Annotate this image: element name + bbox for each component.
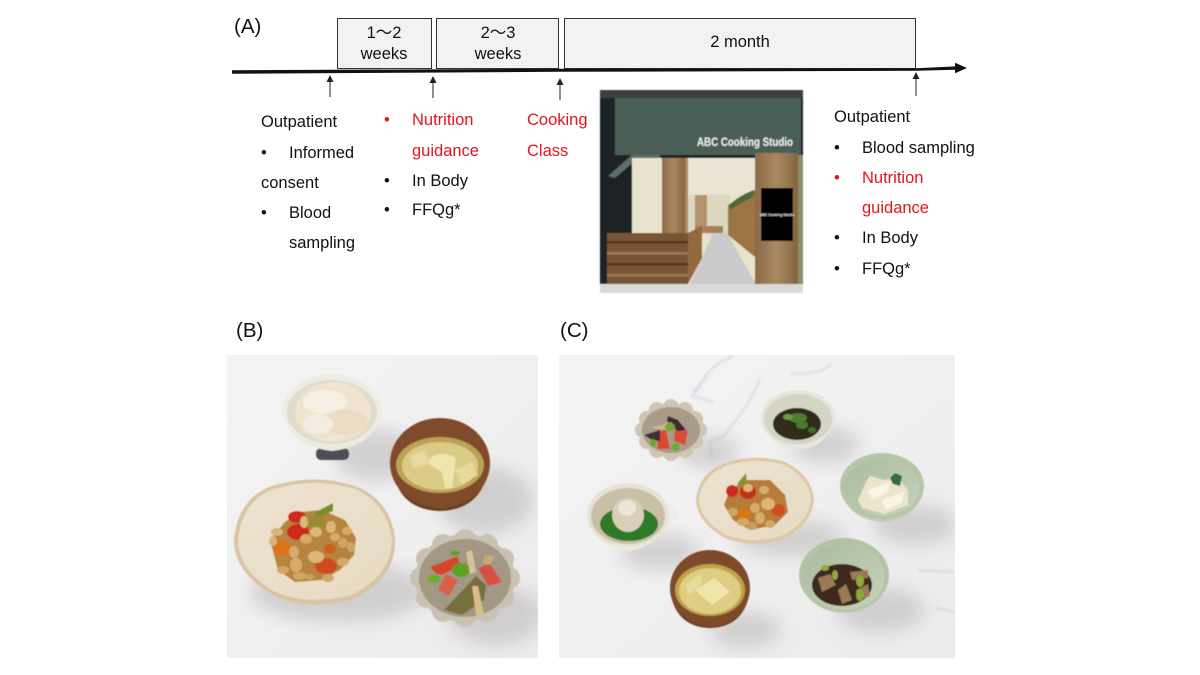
text block: final outpatient visit: • <box>834 260 840 278</box>
arrow: cooking class <box>556 78 564 100</box>
miso soup bowl <box>670 550 750 628</box>
text block: first outpatient visit: • <box>261 144 267 162</box>
text block: cooking class: Class <box>527 142 568 160</box>
text block: final outpatient visit: In Body <box>862 229 919 247</box>
text block: nutrition guidance: • <box>384 111 390 129</box>
period box: 1-2 weeks: 1～2 <box>367 24 401 42</box>
text block: nutrition guidance <box>384 111 479 219</box>
text block: final outpatient visit: • <box>834 229 840 247</box>
period box: 2-3 weeks: 2～3 <box>481 24 515 42</box>
text block: first outpatient visit: Informed <box>289 144 354 162</box>
photo: ABC Cooking Studio storefront: ABC Cooking Studio <box>697 137 793 149</box>
text block: final outpatient visit: Nutrition <box>862 169 923 187</box>
text block: first outpatient visit: Outpatient <box>261 113 338 131</box>
panel A: study timeline <box>232 15 975 293</box>
main plate with soybean stew <box>234 479 395 604</box>
text block: final outpatient visit: • <box>834 139 840 157</box>
photo: ABC Cooking Studio storefront: ABC Cooking Studio <box>760 213 794 217</box>
text block: first outpatient visit: • <box>261 204 267 222</box>
period box: 2 month <box>564 18 916 68</box>
panel label A: (A) <box>234 15 261 38</box>
scalloped side dish <box>410 529 520 627</box>
text block: first outpatient visit: consent <box>261 174 319 192</box>
text block: nutrition guidance: In Body <box>412 172 469 190</box>
arrow: outpatient visit <box>326 75 334 97</box>
green bowl with hijiki <box>799 538 889 613</box>
period box: 2-3 weeks: weeks <box>474 45 521 63</box>
text block: first outpatient visit <box>261 113 355 252</box>
photo C: nutrition-guided meal <box>559 355 957 658</box>
seaweed bowl <box>761 390 835 449</box>
text block: first outpatient visit: Blood <box>289 204 331 222</box>
period box: 2 month: 2 month <box>710 33 770 51</box>
text block: nutrition guidance: Nutrition <box>412 111 473 129</box>
text block: final outpatient visit <box>834 108 975 278</box>
arrow: final outpatient visit <box>912 72 920 96</box>
text block: first outpatient visit: sampling <box>289 234 355 252</box>
lipped bowl with greens and fish <box>587 483 678 551</box>
green bowl with radish salad <box>840 453 924 522</box>
panel label B: (B) <box>236 319 263 342</box>
panel label C: (C) <box>560 319 588 342</box>
text block: nutrition guidance: • <box>384 172 390 190</box>
arrow: nutrition guidance <box>430 76 436 98</box>
marble veining <box>692 356 955 612</box>
text block: final outpatient visit: FFQg* <box>862 260 911 278</box>
center plate with soybean stew <box>696 458 814 544</box>
photo B: standard meal <box>227 355 543 658</box>
timeline arrow <box>232 63 967 74</box>
text block: cooking class <box>527 111 588 160</box>
text block: final outpatient visit: • <box>834 169 840 187</box>
scalloped side dish <box>635 399 707 461</box>
text block: nutrition guidance: guidance <box>412 142 479 160</box>
period box: 1-2 weeks: weeks <box>360 45 407 63</box>
text block: nutrition guidance: • <box>384 201 390 219</box>
period box: 1-2 weeks <box>338 18 432 68</box>
period box: 2-3 weeks <box>436 18 558 68</box>
photo: ABC Cooking Studio storefront <box>600 90 803 293</box>
text block: final outpatient visit: Outpatient <box>834 108 911 126</box>
text block: cooking class: Cooking <box>527 111 588 129</box>
text block: nutrition guidance: FFQg* <box>412 201 461 219</box>
miso soup bowl <box>390 418 490 511</box>
text block: final outpatient visit: Blood sampling <box>862 139 975 157</box>
rice bowl <box>283 374 381 460</box>
text block: final outpatient visit: guidance <box>862 199 929 217</box>
